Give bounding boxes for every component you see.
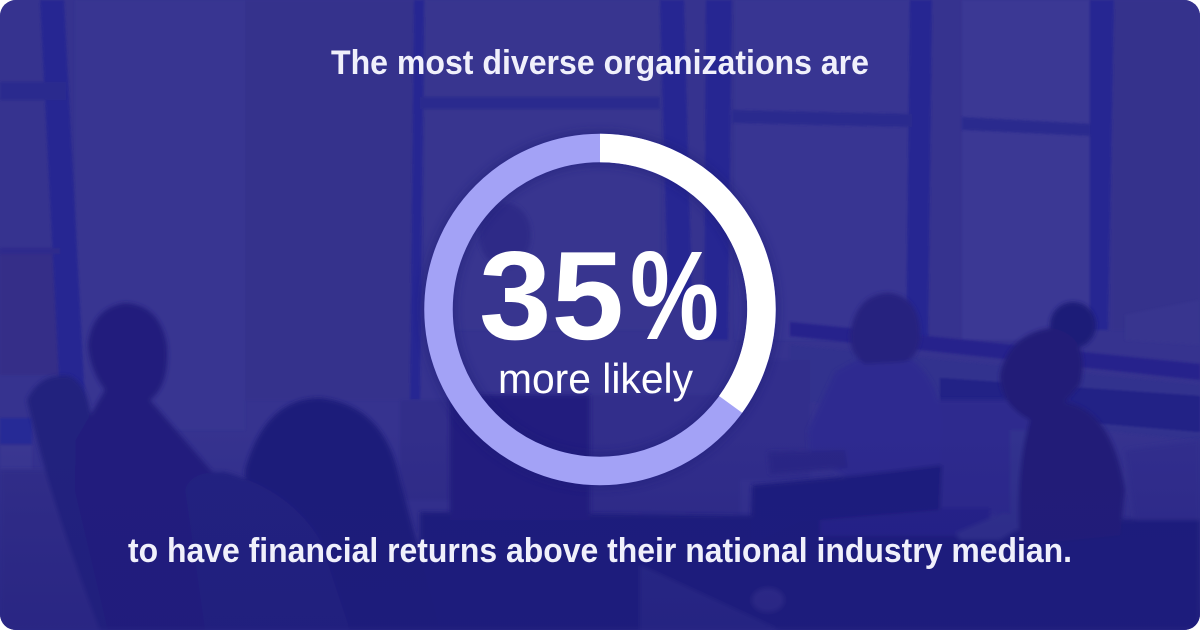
closing line: to have financial returns above their national industry median.: [128, 532, 1072, 570]
right woman: [1050, 302, 1096, 348]
big number: 35: [479, 225, 624, 366]
front chair: [185, 472, 350, 630]
right man: [808, 355, 942, 478]
sofa: [930, 400, 1030, 515]
cushions: [1125, 440, 1200, 520]
sub label: more likely: [498, 355, 693, 402]
ring shadow: [438, 148, 762, 471]
center figure: [450, 203, 590, 520]
big number: [479, 225, 719, 366]
big number: %: [630, 225, 719, 366]
window frames: [0, 0, 1114, 444]
table and glass: [640, 565, 780, 630]
donut chart: 35 percent: [438, 148, 762, 471]
seated woman: [245, 398, 440, 630]
left chair: [27, 376, 125, 630]
people and furniture silhouettes: [0, 203, 1200, 630]
sill and sofa back: [400, 300, 1200, 515]
window panes and walls: [0, 0, 1200, 470]
floor: [0, 470, 130, 630]
heading: The most diverse organizations are: [331, 44, 869, 82]
left man: [75, 303, 250, 630]
